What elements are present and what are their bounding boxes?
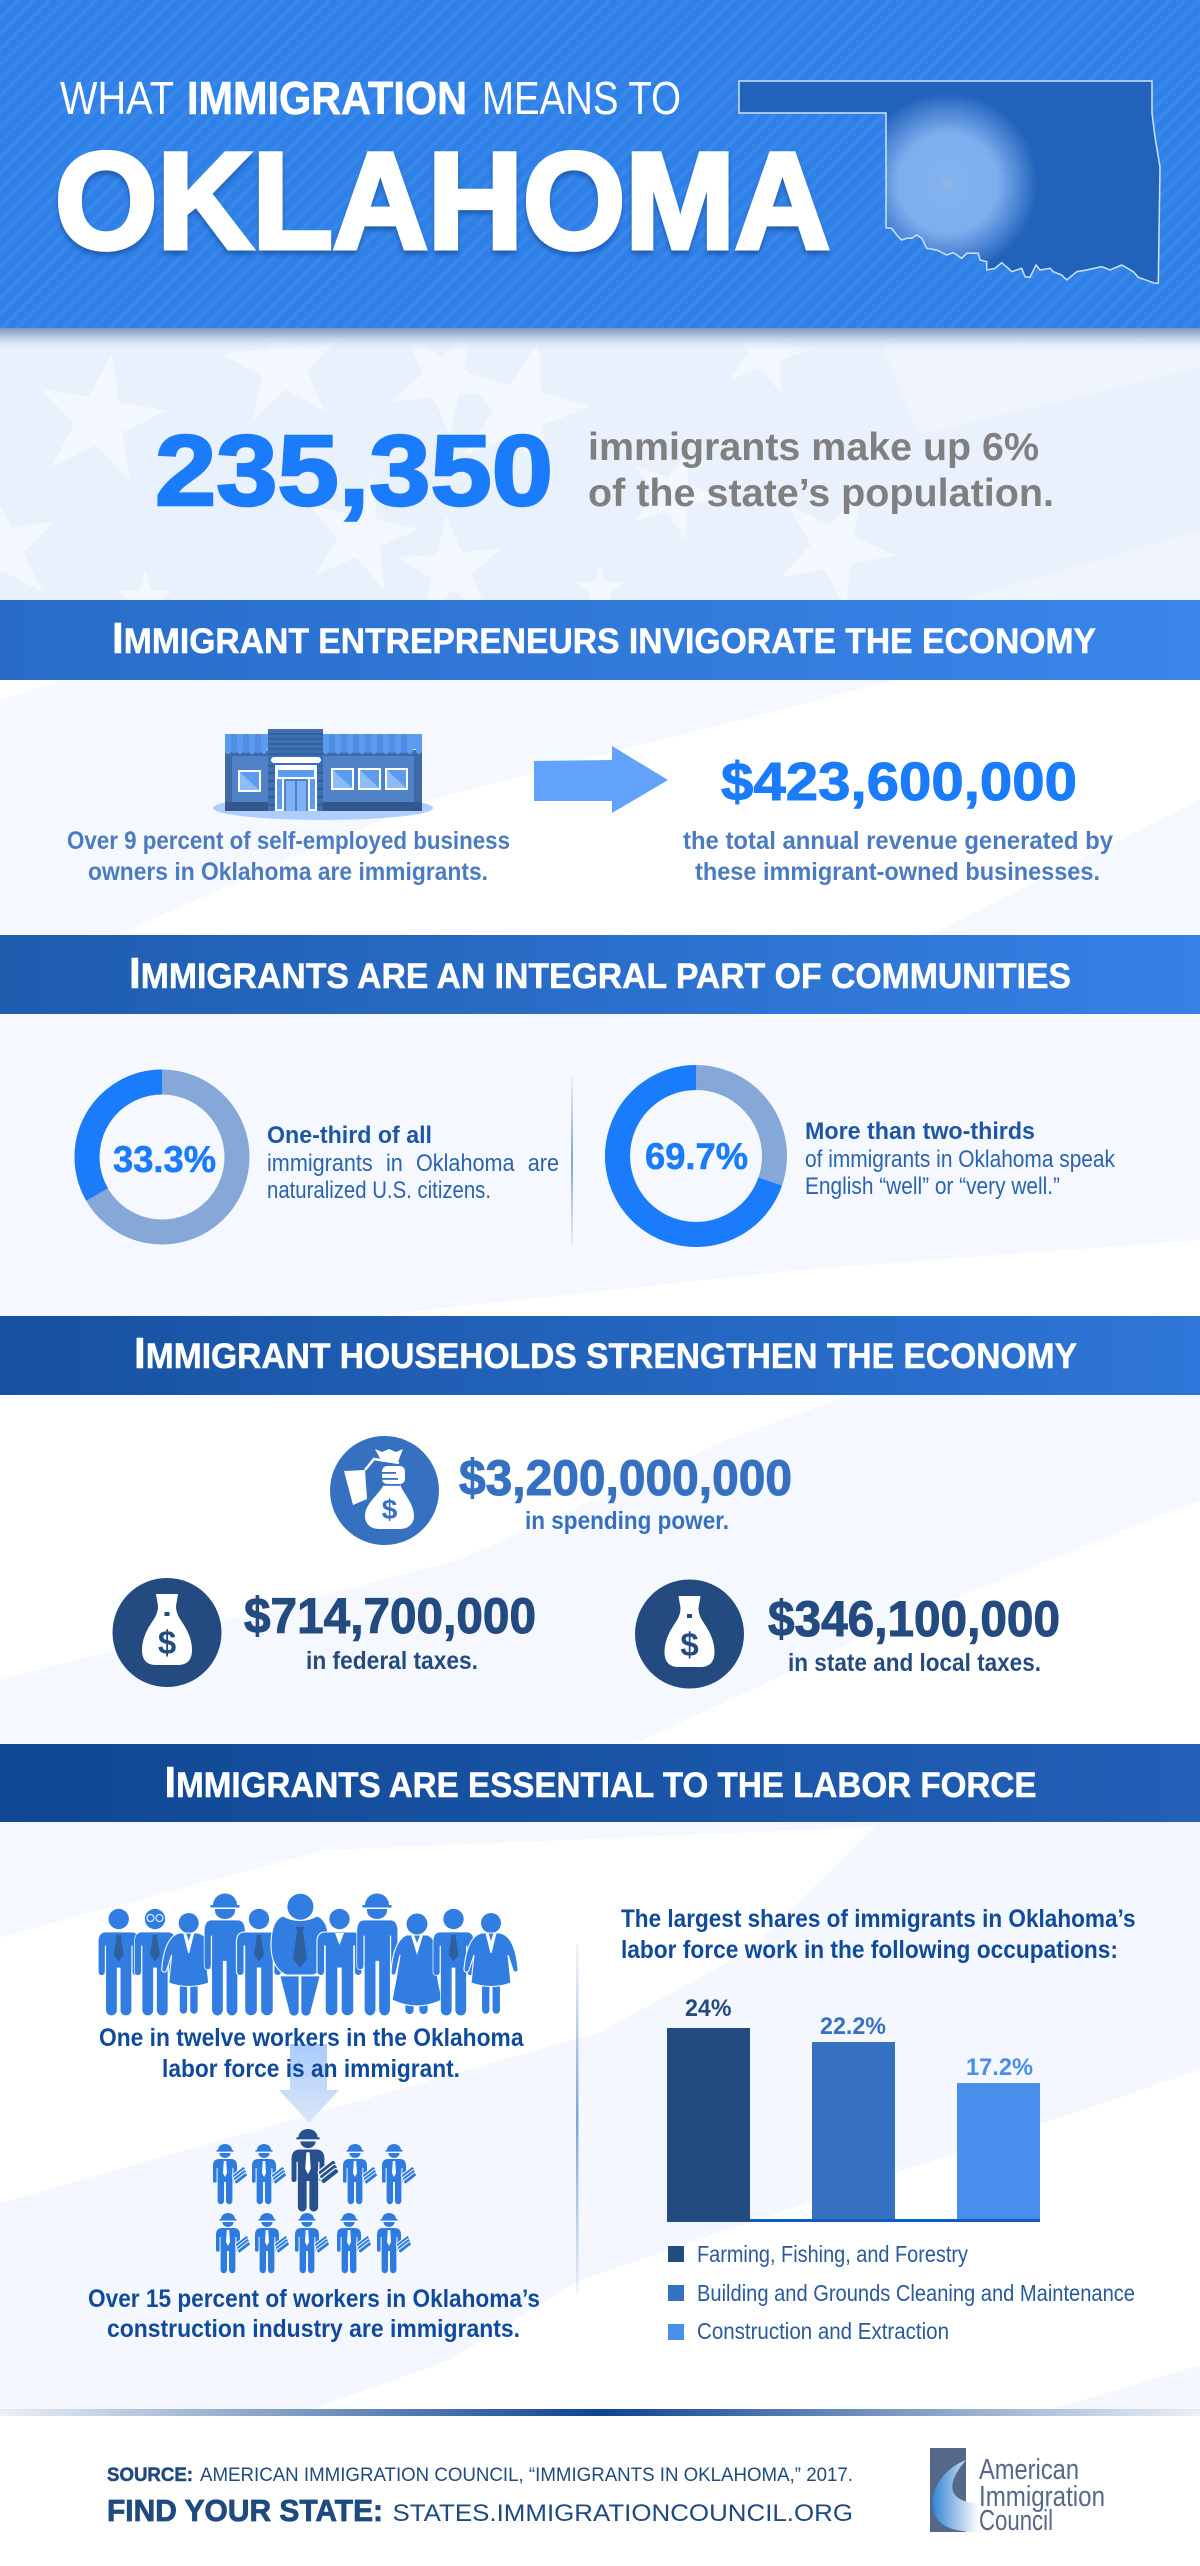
logo: Immigration bbox=[979, 2481, 1105, 2513]
title: what immigration means to: IMMIGRATION bbox=[187, 72, 467, 124]
find your state line: FIND YOUR STATE: bbox=[107, 2493, 383, 2528]
panel: communities bbox=[60, 1055, 1116, 1259]
section band: labor force bbox=[0, 1744, 1200, 1822]
text: self-employed owners: Over 9 percent of self-employed business bbox=[67, 827, 510, 855]
logo: American bbox=[979, 2454, 1079, 2486]
section band: communities: IMMIGRANTS ARE AN INTEGRAL PART OF COMMUNITIES bbox=[129, 949, 1071, 998]
donut chart: 33.3%: 33.3% bbox=[113, 1139, 216, 1180]
panel: households bbox=[112, 1436, 1060, 1688]
find your state line bbox=[107, 2493, 853, 2528]
text: construction share: Over 15 percent of workers in Oklahoma’s bbox=[88, 2285, 540, 2313]
text: one in twelve: One in twelve workers in the Oklahoma bbox=[99, 2024, 524, 2052]
chart heading bbox=[621, 1905, 1136, 1964]
title: what immigration means to: WHAT bbox=[60, 72, 174, 124]
chart heading: The largest shares of immigrants in Oklahoma’s bbox=[621, 1905, 1136, 1933]
icon: money bag state: $ bbox=[680, 1626, 699, 1663]
headline statistic bbox=[155, 415, 1054, 527]
map of Oklahoma bbox=[739, 81, 1160, 283]
icon: money bag state bbox=[635, 1580, 744, 1688]
section band: households bbox=[0, 1316, 1200, 1395]
icon: money bag federal: $ bbox=[158, 1624, 176, 1661]
number: spending power: $3,200,000,000 bbox=[459, 1450, 792, 1506]
text: English proficiency bbox=[805, 1118, 1116, 1200]
panel: labor force left bbox=[88, 1893, 540, 2343]
bar chart: 22.2% bbox=[820, 2013, 886, 2040]
section band: labor force: IMMIGRANTS ARE ESSENTIAL TO THE LABOR FORCE bbox=[164, 1758, 1036, 1807]
text: in spending power: in spending power. bbox=[525, 1507, 729, 1535]
text: self-employed owners bbox=[67, 827, 510, 886]
text: share of population bbox=[588, 426, 1054, 515]
title: Oklahoma: OKLAHOMA bbox=[55, 125, 830, 278]
chart heading: labor force work in the following occupations: bbox=[621, 1936, 1118, 1964]
title: what immigration means to: MEANS TO bbox=[482, 72, 681, 124]
text: English proficiency: English “well” or “very well.” bbox=[805, 1173, 1060, 1200]
number: business revenue: $423,600,000 bbox=[721, 752, 1077, 812]
donut chart: 69.7% bbox=[596, 1056, 796, 1256]
text: naturalized citizens: naturalized U.S. citizens. bbox=[267, 1177, 491, 1204]
icon: hand holding money bag bbox=[330, 1436, 439, 1545]
text: in federal taxes: in federal taxes. bbox=[306, 1647, 478, 1675]
icon: money bag federal bbox=[112, 1578, 222, 1687]
section band: households: IMMIGRANT HOUSEHOLDS STRENGTHEN THE ECONOMY bbox=[134, 1329, 1077, 1378]
source line: SOURCE: bbox=[107, 2465, 193, 2486]
text: share of population: immigrants make up 6% bbox=[588, 426, 1039, 469]
header panel bbox=[0, 0, 1200, 352]
bar chart: 24% bbox=[685, 1995, 732, 2022]
find your state line: STATES.IMMIGRATIONCOUNCIL.ORG bbox=[392, 2500, 853, 2527]
icon: row of workers bbox=[98, 1893, 518, 2016]
number: federal taxes: $714,700,000 bbox=[244, 1588, 536, 1644]
text: revenue description bbox=[683, 827, 1113, 886]
text: one in twelve: labor force is an immigrant. bbox=[162, 2055, 460, 2083]
legend bbox=[668, 2241, 1135, 2344]
icon: construction workers bbox=[213, 2129, 417, 2273]
text: revenue description: the total annual revenue generated by bbox=[683, 827, 1113, 855]
section band: entrepreneurs bbox=[0, 600, 1200, 680]
panel: labor force chart bbox=[621, 1905, 1136, 2344]
legend: Farming, Fishing, and Forestry bbox=[697, 2241, 968, 2267]
number: 235,350: 235,350 bbox=[155, 415, 553, 527]
footer bbox=[0, 2409, 1200, 2566]
text: construction share bbox=[88, 2285, 540, 2343]
text: in state and local taxes: in state and local taxes. bbox=[788, 1649, 1041, 1677]
donut chart: 33.3% bbox=[60, 1055, 264, 1259]
text: share of population: of the state’s population. bbox=[588, 472, 1054, 515]
logo: Council bbox=[979, 2505, 1053, 2537]
text: English proficiency: of immigrants in Oklahoma speak bbox=[805, 1146, 1116, 1173]
bar chart bbox=[667, 1995, 1040, 2222]
text: construction share: construction industry are immigrants. bbox=[107, 2315, 520, 2343]
donut chart: 69.7%: 69.7% bbox=[645, 1136, 748, 1177]
text: naturalized citizens: One-third of all bbox=[267, 1122, 432, 1149]
bar chart: 17.2% bbox=[966, 2054, 1033, 2081]
arrow bbox=[534, 746, 668, 813]
logo bbox=[930, 2448, 1105, 2537]
panel: entrepreneurs bbox=[67, 729, 1113, 886]
text: English proficiency: More than two-thirds bbox=[805, 1118, 1035, 1145]
section band: communities bbox=[0, 935, 1200, 1014]
icon: hand holding money bag: $ bbox=[382, 1494, 398, 1525]
text: self-employed owners: owners in Oklahoma are immigrants. bbox=[88, 858, 488, 886]
arrow: down bbox=[279, 2044, 339, 2123]
legend: Construction and Extraction bbox=[697, 2318, 949, 2344]
text: naturalized citizens bbox=[267, 1122, 559, 1204]
number: state and local taxes: $346,100,000 bbox=[768, 1591, 1060, 1647]
text: revenue description: these immigrant-owned businesses. bbox=[695, 858, 1100, 886]
legend: Building and Grounds Cleaning and Maintenance bbox=[697, 2280, 1135, 2306]
icon: storefront bbox=[213, 729, 433, 820]
title: what immigration means to bbox=[60, 72, 681, 124]
section band: entrepreneurs: IMMIGRANT ENTREPRENEURS INVIGORATE THE ECONOMY bbox=[112, 614, 1096, 663]
source line: AMERICAN IMMIGRATION COUNCIL, “IMMIGRANTS IN OKLAHOMA,” 2017. bbox=[200, 2465, 853, 2486]
text: one in twelve bbox=[99, 2024, 524, 2083]
text: naturalized citizens: immigrants in Oklahoma are bbox=[267, 1150, 559, 1177]
